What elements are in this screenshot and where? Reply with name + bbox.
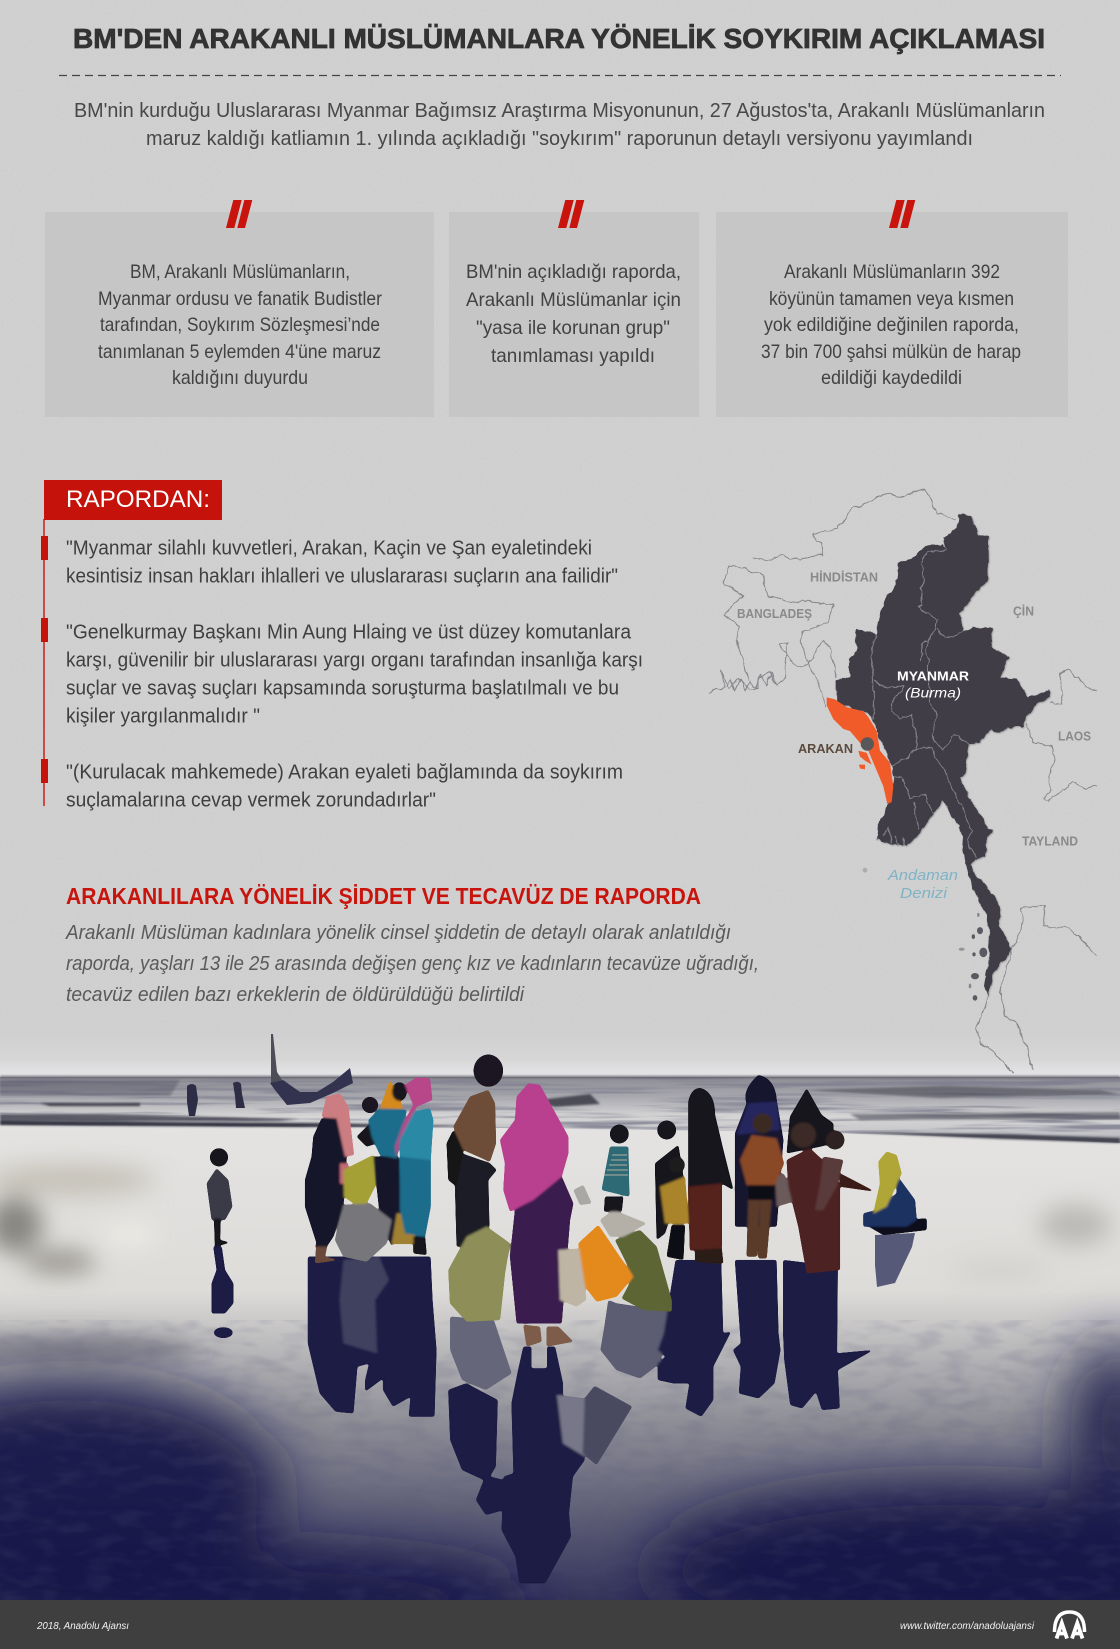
person: child in yellow (660, 1157, 688, 1260)
sea (0, 1077, 1120, 1143)
reflection: man (448, 1383, 504, 1515)
panel text: yok edildiğine değinilen raporda, (764, 314, 1019, 336)
person: boy (740, 1113, 784, 1258)
heading: rapordan: RAPORDAN: (66, 486, 210, 513)
person: child on left (207, 1148, 233, 1338)
boat (270, 1034, 353, 1105)
map: myanmar (708, 489, 1097, 1073)
reflection: left group (308, 1257, 436, 1417)
person: child in dark (655, 1121, 683, 1240)
reflection: olive sack (450, 1317, 512, 1390)
people: left group (207, 1055, 672, 1347)
panel: 392 köy (716, 200, 1068, 417)
person: woman in pink scarf (305, 1093, 354, 1263)
panel: soykırım sözleşmesi (45, 200, 434, 417)
intro text (74, 100, 1045, 150)
icon: quote mark (558, 200, 584, 228)
reflection: jerrycan and striped bag (557, 1386, 632, 1465)
map: state borders (872, 549, 977, 858)
photo: refugees on the beach (0, 1030, 1120, 1649)
person: child in stripes (602, 1125, 629, 1212)
reflection: right sack (601, 1300, 672, 1378)
panel text: kaldığını duyurdu (172, 367, 308, 389)
people: right group (655, 1075, 927, 1273)
quote 1 (41, 536, 618, 588)
footer (0, 1600, 1120, 1649)
panel: yasa ile korunan grup (449, 200, 699, 417)
panel text: tanımlaması yapıldı (491, 345, 655, 367)
panel text: Myanmar ordusu ve fanatik Budistler (98, 288, 382, 310)
person: woman with orange scarf (357, 1080, 407, 1247)
panel text (466, 261, 681, 367)
panel text: "yasa ile korunan grup" (476, 317, 670, 339)
italic text block: tecavüz edilen bazı erkeklerin de öldürüldüğü belirtildi (66, 984, 525, 1006)
distant figures (187, 1082, 245, 1116)
italic text block: raporda, yaşları 13 ile 25 arasında değişen genç kız ve kadınların tecavüze uğradığı, (66, 953, 759, 975)
bag: sacks and jerrycan (558, 1185, 672, 1312)
panel text: 37 bin 700 şahsi mülkün de harap (761, 341, 1021, 363)
map: myanmar silhouette (837, 513, 1049, 996)
footer credit: 2018, Anadolu Ajansı (36, 1621, 129, 1632)
map labels: BANGLADEŞ (737, 607, 812, 621)
sky (0, 1030, 1120, 1077)
subheading: şiddet ve tecavüz: ARAKANLILARA YÖNELİK ŞİDDET VE TECAVÜZ DE RAPORDA (66, 883, 701, 909)
title: BM'DEN ARAKANLI MÜSLÜMANLARA YÖNELİK SOYKIRIM AÇIKLAMASI (73, 23, 1045, 54)
panel text: edildiği kaydedildi (821, 367, 962, 389)
bag: olive sack (448, 1227, 510, 1322)
person: man (447, 1055, 503, 1247)
icon: anadolu agency logo (1054, 1612, 1084, 1638)
bag: yellow sack (343, 1155, 375, 1210)
map: neighbouring borders (708, 489, 1097, 1073)
map: sittwe marker (861, 737, 874, 751)
quote 2: kişiler yargılanmalıdır " (66, 706, 260, 728)
quote 2: suçlar ve savaş suçları kapsamında soruşturma başlatılmalı ve bu (66, 678, 619, 700)
bag: grey sack (335, 1203, 392, 1262)
icon: quote mark (226, 200, 252, 228)
person: woman in black (688, 1088, 733, 1263)
italic text block: Arakanlı Müslüman kadınlara yönelik cinsel şiddetin de detaylı olarak anlatıldığı (65, 922, 731, 944)
map labels: (Burma) (905, 684, 961, 700)
bag: patterned bag (775, 1173, 798, 1207)
panel text: BM, Arakanlı Müslümanların, (130, 261, 350, 283)
map labels: MYANMAR (897, 670, 969, 684)
sand (0, 1120, 1120, 1600)
panel text: Arakanlı Müslümanların 392 (784, 261, 1000, 283)
italic text block (65, 922, 759, 1006)
section: rapordan quotes (41, 480, 643, 812)
panel text: tanımlanan 5 eylemden 4'üne maruz (98, 341, 381, 363)
person: seated woman (863, 1152, 927, 1235)
map labels: HİNDİSTAN (810, 570, 878, 584)
panel text: BM'nin açıkladığı raporda, (466, 261, 681, 283)
map labels: Andaman (887, 867, 958, 884)
panel text: köyünün tamamen veya kısmen (769, 288, 1014, 310)
map: arakan state (827, 697, 893, 804)
quote 2 (41, 618, 643, 728)
quote 3 (41, 759, 623, 812)
intro text: maruz kaldığı katliamın 1. yılında açıkladığı "soykırım" raporunun detaylı versiyonu yayımlandı (146, 128, 973, 150)
panel text (761, 261, 1021, 389)
map labels (737, 570, 1091, 902)
icon: quote mark (889, 200, 915, 228)
person: hooded back (787, 1088, 833, 1153)
panel text: tarafından, Soykırım Sözleşmesi’nde (100, 314, 380, 336)
intro text: BM'nin kurduğu Uluslararası Myanmar Bağımsız Araştırma Misyonunun, 27 Ağustos'ta, Arakanlı Müslümanların (74, 100, 1045, 122)
map: islands (863, 868, 987, 1001)
heading: rapordan (44, 480, 222, 520)
person: woman in magenta scarf (500, 1083, 573, 1347)
quote 3: "(Kurulacak mahkemede) Arakan eyaleti bağlamında da soykırım (66, 762, 623, 784)
map labels: TAYLAND (1022, 834, 1078, 848)
reflection: seated woman (875, 1233, 915, 1287)
person: woman in teal (392, 1077, 433, 1255)
map labels: ARAKAN (798, 742, 853, 756)
map labels: ÇİN (1013, 604, 1034, 618)
quote 2: karşı, güvenilir bir uluslararası yargı organı tarafından insanlığa karşı (66, 650, 643, 672)
panel text (98, 261, 382, 389)
reflection: magenta woman (502, 1347, 585, 1583)
reflections: lower group (308, 1257, 873, 1583)
quote 3: suçlamalarına cevap vermek zorundadırlar" (66, 790, 436, 812)
child's striped shirt detail (604, 1155, 628, 1175)
reflection: right group 2 (733, 1260, 873, 1410)
map labels: LAOS (1058, 730, 1091, 744)
quote 1: kesintisiz insan hakları ihlalleri ve uluslararası suçların ana failidir" (66, 566, 618, 588)
person: hooded woman behind (735, 1075, 783, 1227)
footer url: www.twitter.com/anadoluajansi (900, 1621, 1035, 1632)
sand cloud reflections (0, 1164, 1111, 1361)
reflection: right group 1 (658, 1260, 731, 1417)
quote 2: "Genelkurmay Başkanı Min Aung Hlaing ve üst düzey komutanlara (66, 622, 632, 644)
quote 1: "Myanmar silahlı kuvvetleri, Arakan, Kaçin ve Şan eyaletindeki (66, 538, 592, 560)
panel text: Arakanlı Müslümanlar için (466, 289, 681, 311)
person: girl (787, 1122, 875, 1273)
map labels: Denizi (900, 885, 948, 902)
